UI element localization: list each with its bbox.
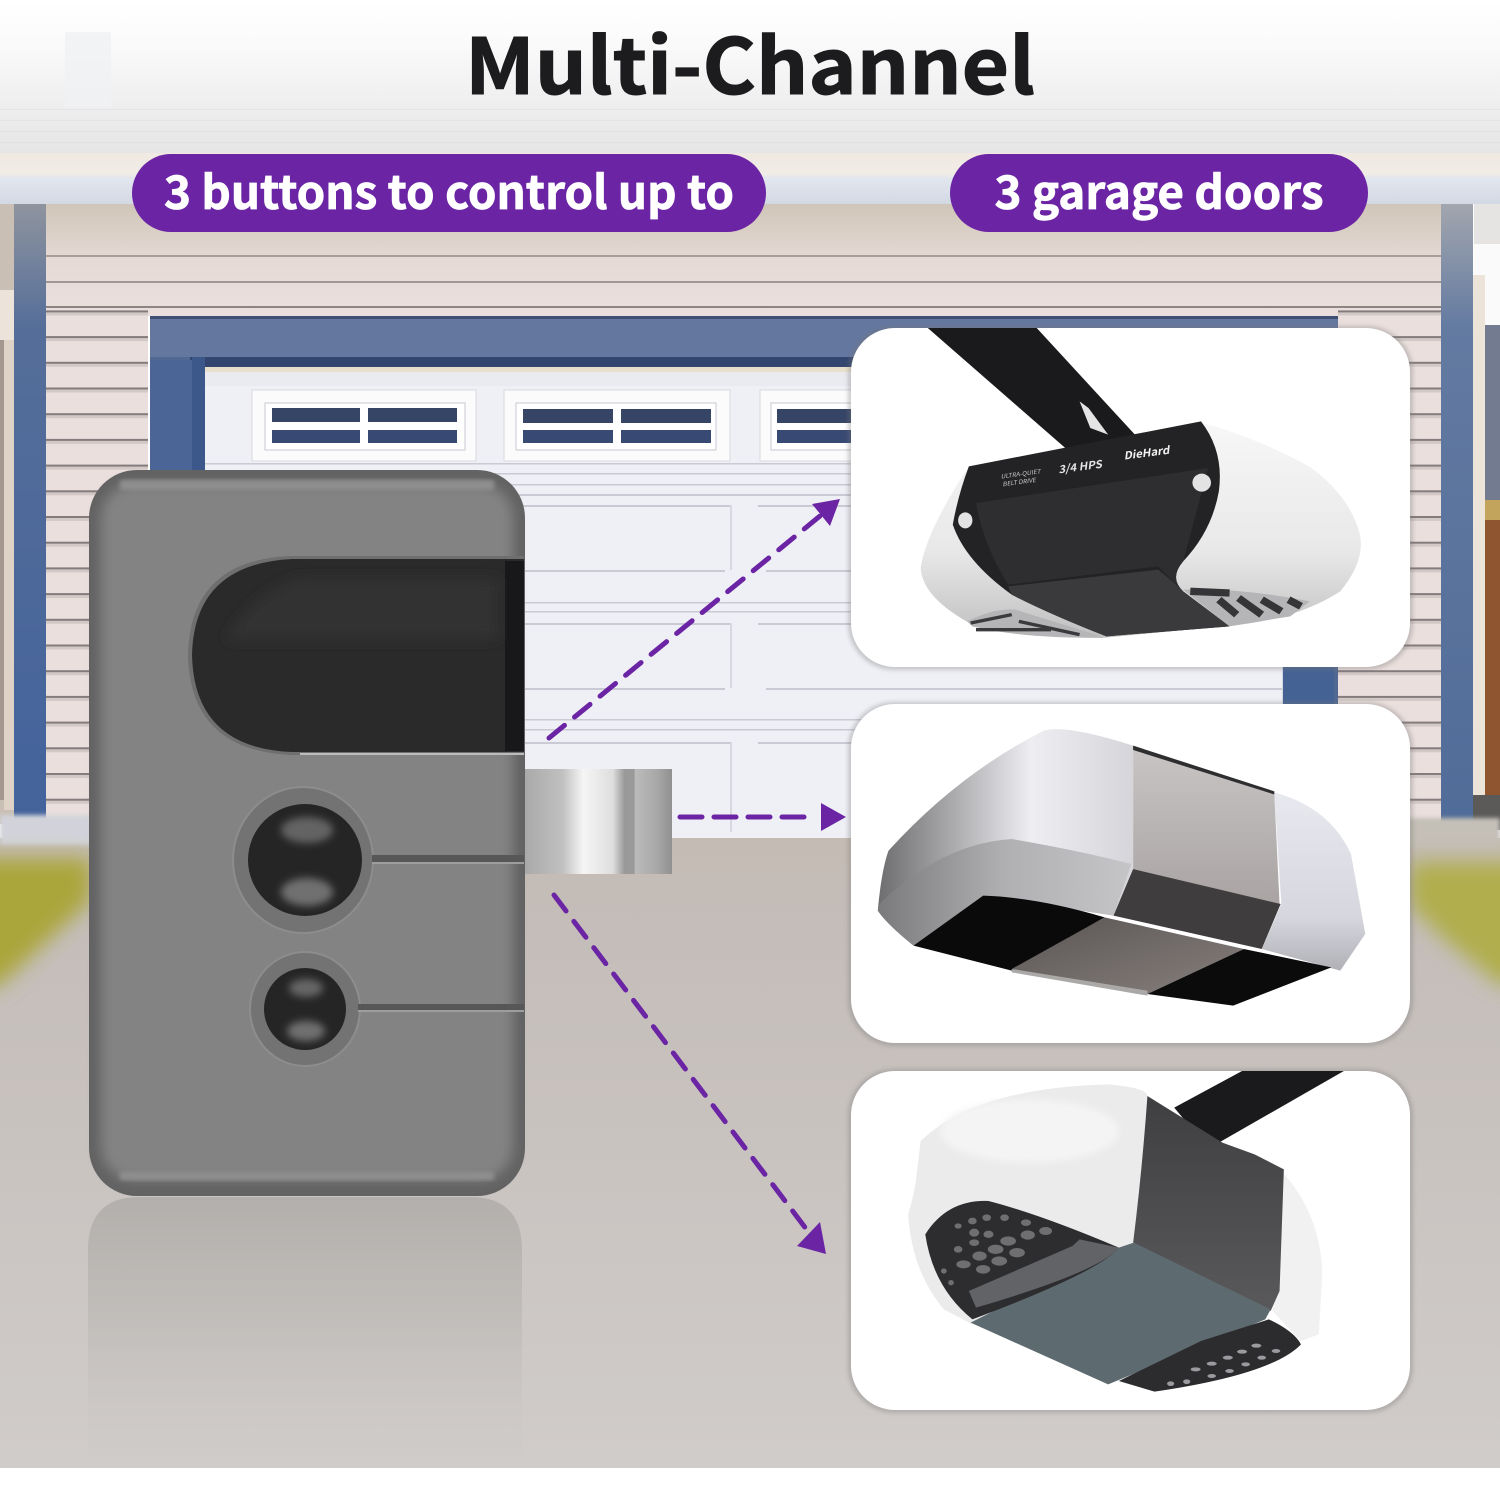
right edge: [1474, 204, 1500, 244]
remote reflection: [88, 1197, 522, 1468]
title: Multi-Channel: [465, 6, 1035, 117]
door frame: [150, 316, 1338, 706]
left edge: [0, 204, 14, 824]
underside: [913, 896, 1105, 971]
grey middle: [1133, 746, 1280, 904]
left vent: [925, 1201, 1119, 1319]
door windows: [252, 390, 861, 461]
vents: [1183, 589, 1310, 626]
panel: top opener: [848, 326, 1413, 670]
pill: 3 buttons to control up to: 3 buttons to control up to: [164, 157, 734, 223]
rail: [1174, 1071, 1344, 1143]
arrow: to middle opener: [680, 803, 846, 831]
lower face: [971, 1243, 1271, 1384]
columns: [14, 204, 46, 822]
remote control: [89, 470, 525, 1196]
driveway: [0, 838, 1500, 1468]
garage door: [205, 367, 1282, 839]
slate face: [1133, 1096, 1284, 1311]
arrow: to top opener: [549, 499, 840, 738]
rail: [928, 328, 1135, 448]
door slat rails: [205, 463, 1282, 744]
visor clip: [524, 769, 672, 874]
screws: [958, 512, 972, 528]
arrow: to bottom opener: [554, 895, 826, 1254]
gutter and soffit: [0, 153, 1500, 204]
silver end: [878, 729, 1133, 946]
panel: top opener: BELT DRIVE: [1002, 475, 1038, 488]
black cover: [953, 421, 1230, 636]
white end: [1262, 792, 1365, 971]
panel: middle opener: [848, 702, 1413, 1046]
brand labels: ULTRA-QUIET: [1000, 467, 1042, 481]
grass: [0, 858, 91, 990]
lower button: [250, 952, 524, 1066]
pill: 3 garage doors: [950, 154, 1368, 232]
white shell: [908, 1084, 1147, 1324]
pill: 3 garage doors: 3 garage doors: [994, 157, 1324, 223]
white housing: [921, 423, 1361, 638]
large button: [188, 556, 524, 755]
panel: bottom opener: [848, 1069, 1413, 1413]
right vent: [1119, 1319, 1301, 1392]
panel: top opener: DieHard: [1122, 442, 1172, 463]
panel: top opener: 3/4 HPS: [1057, 456, 1105, 477]
middle button: [233, 787, 524, 933]
roof: [0, 0, 1500, 155]
siding: [46, 204, 1442, 316]
